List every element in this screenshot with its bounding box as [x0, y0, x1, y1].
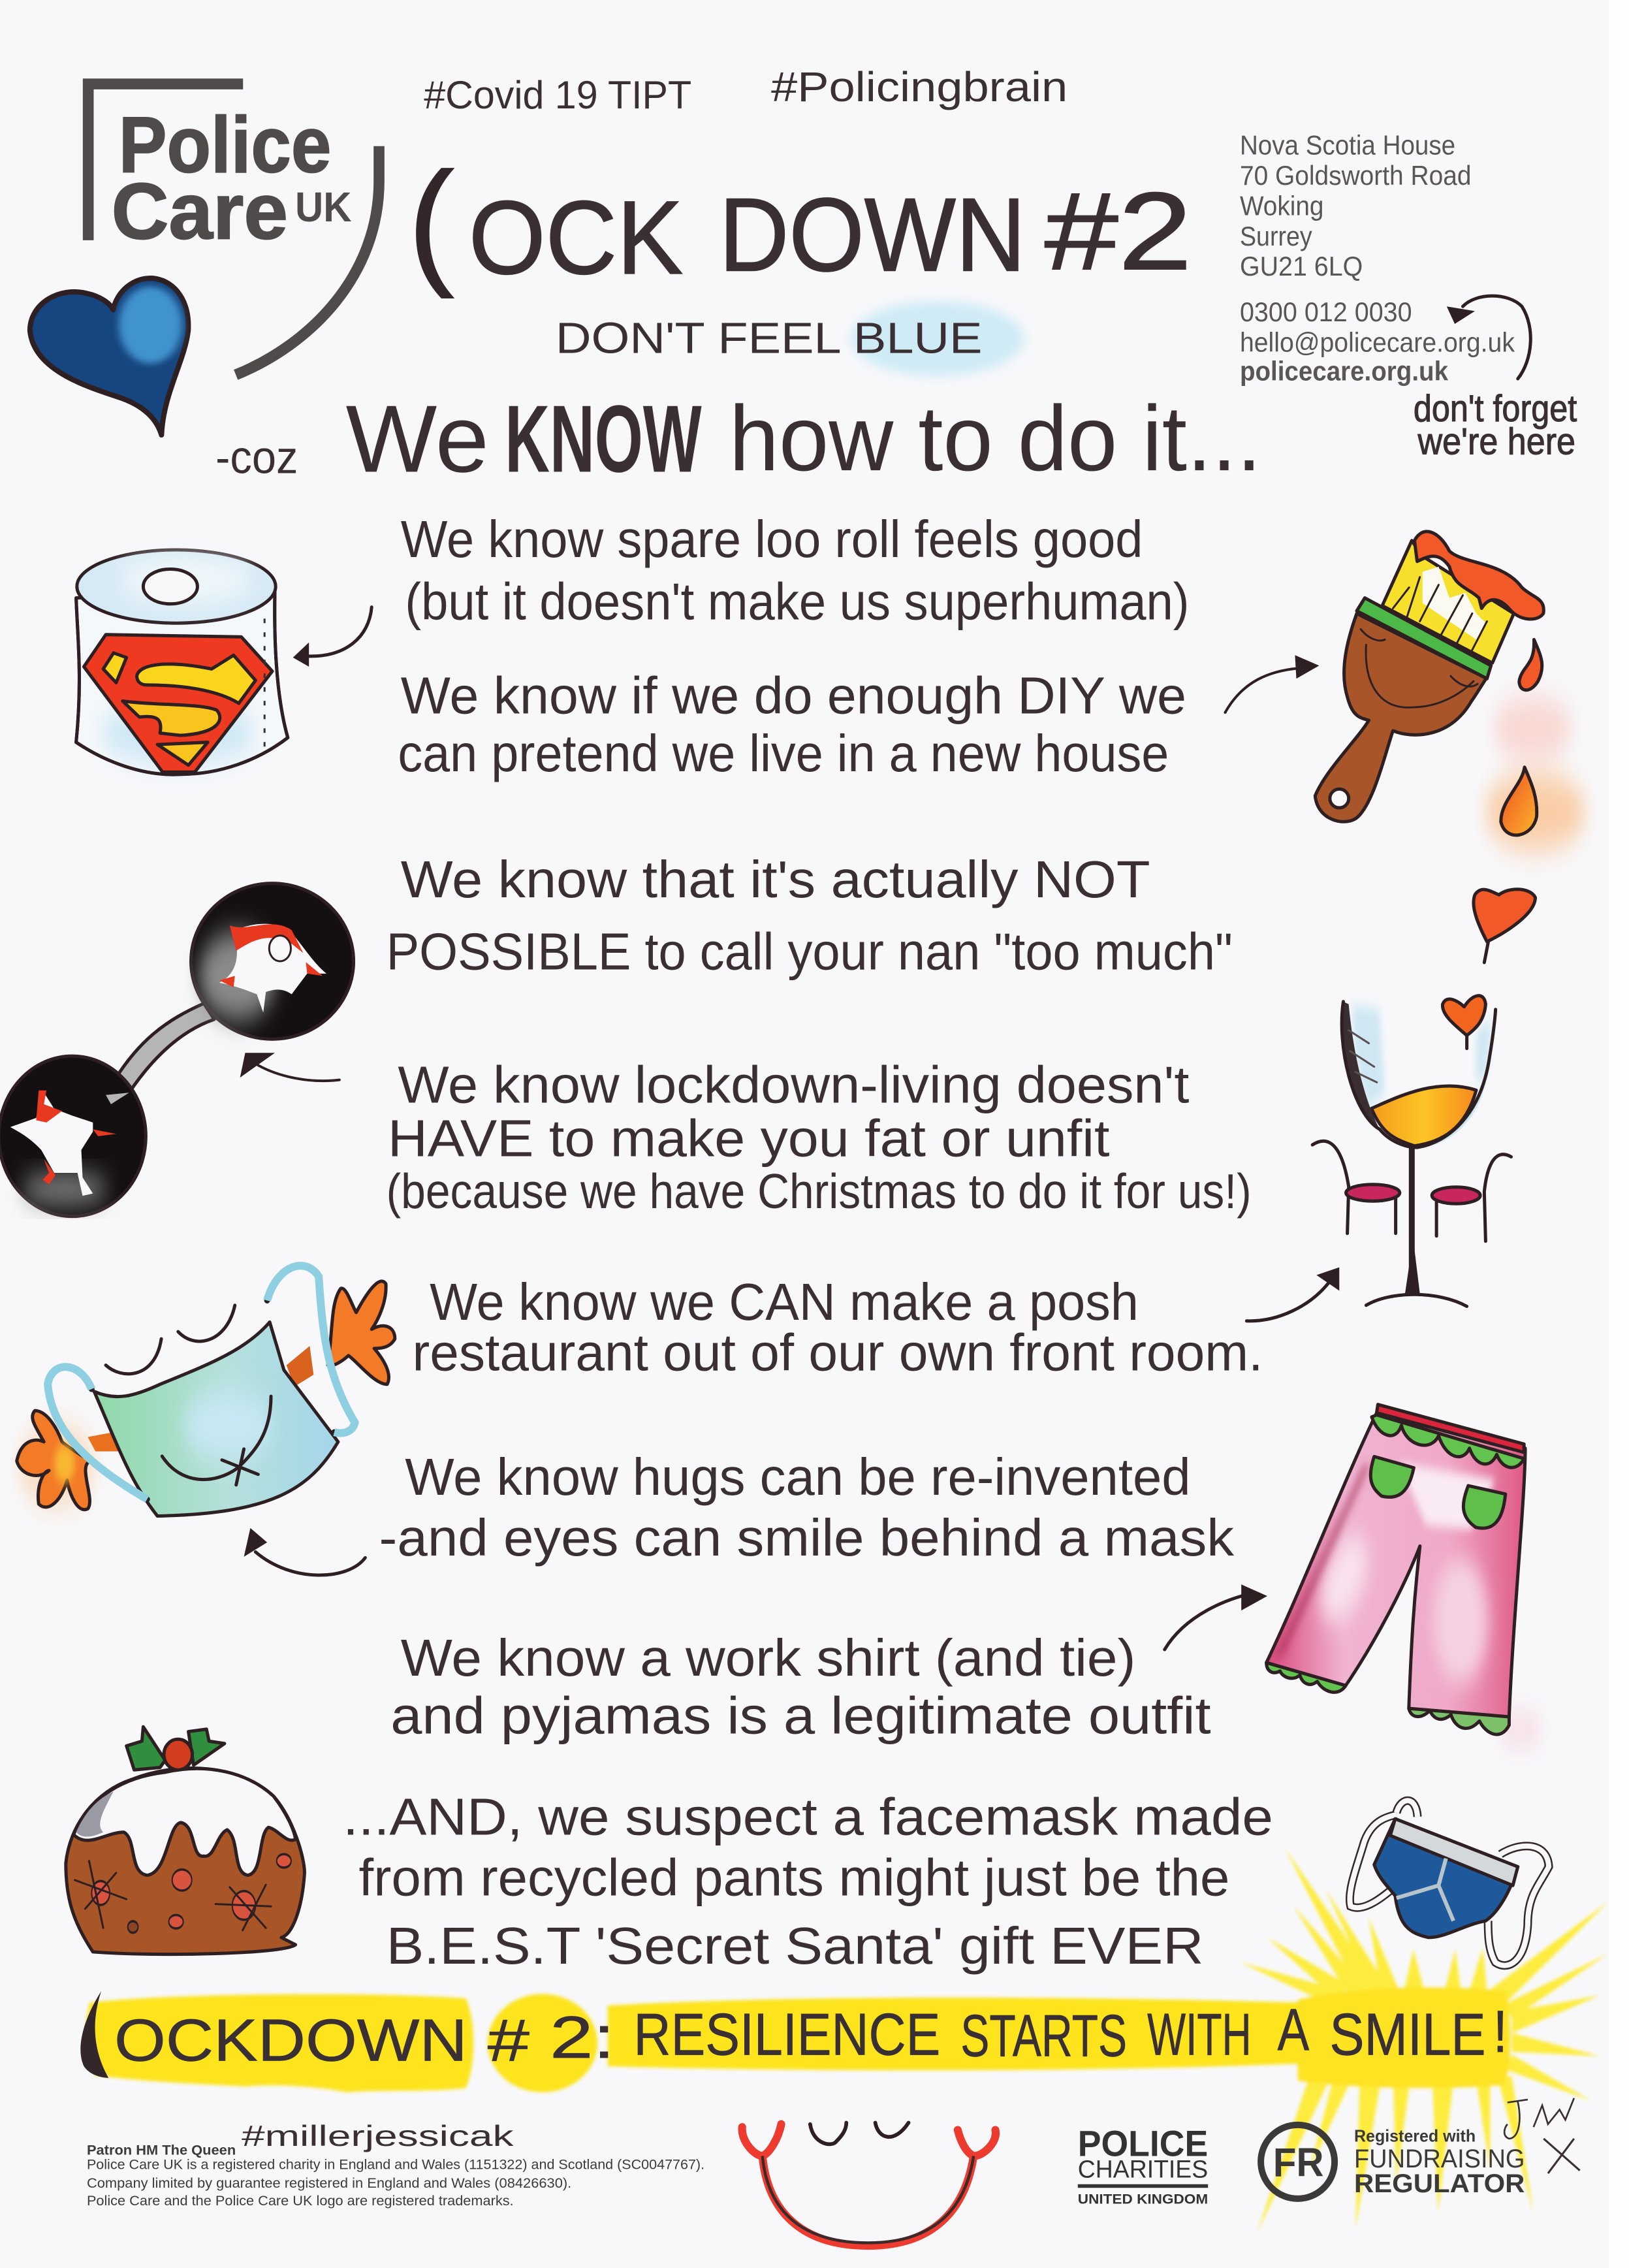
address block: 70 Goldsworth Road	[1240, 160, 1471, 191]
icon: floating heart small	[1442, 996, 1485, 1049]
Police Charities logo: CHARITIES	[1078, 2156, 1208, 2183]
banner: resilience starts with a smile: WITH	[1147, 2002, 1252, 2068]
body text: fat or unfit: HAVE to make you fat or unfit	[388, 1109, 1110, 1167]
footer legal text: Police Care and the Police Care UK logo are registered trademarks.	[87, 2194, 514, 2209]
arrow to toilet roll	[293, 607, 372, 667]
body text: hugs: -and eyes can smile behind a mask	[379, 1509, 1234, 1567]
Fundraising Regulator logo: FUNDRAISING	[1354, 2145, 1525, 2173]
subtitle: don't feel blue	[556, 301, 1024, 376]
body text: call your nan	[387, 850, 1233, 981]
body text: call your nan: POSSIBLE to call your nan "too much"	[387, 923, 1233, 981]
body text: fat or unfit: We know lockdown-living doesn't	[398, 1055, 1189, 1113]
Police Charities logo	[1078, 2123, 1208, 2207]
illustration: paint brush	[1315, 532, 1587, 850]
note: don't forget we're here: don't forget	[1414, 388, 1577, 430]
icon: floating heart large	[1474, 889, 1535, 963]
illustration: christmas pudding	[66, 1727, 304, 1955]
arrowhead	[1241, 1584, 1267, 1610]
body text: secret santa: from recycled pants might just be the	[359, 1849, 1229, 1907]
title: (	[408, 144, 454, 299]
banner: resilience starts with a smile: OCKDOWN	[114, 2007, 467, 2073]
body text: hugs	[379, 1448, 1234, 1567]
body text: work shirt: and pyjamas is a legitimate outfit	[390, 1686, 1211, 1744]
banner: resilience starts with a smile: SMILE	[1329, 2002, 1486, 2068]
note: don't forget we're here: we're here	[1417, 421, 1575, 463]
body text: hugs: We know hugs can be re-invented	[405, 1448, 1191, 1506]
illustration: superman toilet roll	[76, 550, 288, 775]
heading: we know how to do it: -coz	[215, 432, 298, 484]
heading: we know how to do it: KNOW	[505, 385, 702, 492]
address block: Surrey	[1240, 221, 1312, 251]
banner: resilience starts with a smile: 2:	[550, 2005, 615, 2071]
illustration: wine glass and chairs	[1312, 889, 1535, 1306]
body text: loo roll: We know spare loo roll feels good	[401, 510, 1143, 568]
Police Care UK logo: UK	[295, 184, 351, 231]
body text: loo roll: (but it doesn't make us superhuman)	[405, 572, 1189, 630]
title: DOWN	[719, 176, 1026, 293]
heading: we know how to do it: We	[346, 385, 489, 492]
Fundraising Regulator logo: Registered with	[1354, 2127, 1476, 2145]
heading: we know how to do it: how to do it...	[729, 387, 1261, 490]
body text: DIY	[398, 666, 1186, 782]
body text: call your nan: We know that it's actually NOT	[401, 850, 1150, 908]
banner: resilience starts with a smile: RESILIENCE	[634, 2002, 940, 2068]
address block: Nova Scotia House	[1240, 130, 1455, 161]
body text: posh restaurant: restaurant out of our own front room.	[413, 1323, 1263, 1381]
illustration: face mask with flowers	[17, 1266, 395, 1516]
body text: work shirt: We know a work shirt (and tie)	[401, 1629, 1135, 1687]
heading: we know how to do it	[215, 385, 1261, 492]
title: OCK	[469, 180, 683, 296]
Police Charities logo: UNITED KINGDOM	[1078, 2192, 1208, 2207]
banner: resilience starts with a smile	[80, 1991, 1508, 2092]
Police Care UK logo: Care	[112, 167, 288, 256]
Fundraising Regulator logo: REGULATOR	[1354, 2169, 1525, 2198]
body text: posh restaurant	[413, 1273, 1263, 1381]
footer legal text: Police Care UK is a registered charity in England and Wales (1151322) and Scotland (SC0047767).	[87, 2157, 704, 2172]
address block: hello@policecare.org.uk	[1240, 327, 1515, 357]
body text: secret santa	[343, 1788, 1273, 1975]
banner: resilience starts with a smile: !	[1493, 1999, 1508, 2065]
body text: fat or unfit: (because we have Christmas to do it for us!)	[387, 1164, 1252, 1219]
address block: Woking	[1240, 191, 1323, 221]
Fundraising Regulator logo: FR	[1273, 2141, 1323, 2186]
Police Care UK logo	[88, 84, 379, 375]
banner: resilience starts with a smile: STARTS	[960, 2004, 1127, 2069]
body text: secret santa: ...AND, we suspect a facemask made	[343, 1788, 1273, 1846]
address block: 0300 012 0030	[1240, 296, 1412, 327]
body text: loo roll	[401, 510, 1189, 630]
title: #2	[1045, 170, 1192, 293]
note: don't forget we're here	[1414, 388, 1577, 463]
signature	[1504, 2098, 1580, 2173]
illustration: dumbbell	[0, 884, 354, 1217]
smiley face	[742, 2123, 996, 2246]
Fundraising Regulator logo	[1261, 2125, 1525, 2199]
body text: secret santa: B.E.S.T 'Secret Santa' gift EVER	[387, 1917, 1204, 1975]
subtitle: don't feel blue: DON'T FEEL BLUE	[556, 315, 983, 363]
icon: blue heart	[30, 278, 188, 435]
Police Charities logo: POLICE	[1078, 2123, 1208, 2164]
footer legal text: Company limited by guarantee registered in England and Wales (08426630).	[87, 2176, 571, 2191]
illustration: pants face mask	[1350, 1800, 1549, 1966]
body text: posh restaurant: We know we CAN make a posh	[430, 1273, 1139, 1331]
arrow to dumbbell	[240, 1053, 340, 1081]
arrow to contact details	[1447, 296, 1530, 379]
footer legal text: Patron HM The Queen	[87, 2143, 236, 2158]
body text: DIY: We know if we do enough DIY we	[401, 666, 1186, 724]
banner: resilience starts with a smile: A	[1278, 1998, 1310, 2064]
arrow to paint brush	[1225, 655, 1319, 712]
body text: work shirt	[390, 1629, 1211, 1744]
address block: policecare.org.uk	[1240, 356, 1449, 387]
arrow to trousers	[1165, 1595, 1247, 1650]
footer legal text	[87, 2143, 704, 2209]
hashtag: Policingbrain: #Policingbrain	[771, 63, 1068, 110]
banner: resilience starts with a smile: #	[488, 2007, 530, 2073]
illustration: pink pyjama trousers	[1267, 1405, 1543, 1750]
address block: GU21 6LQ	[1240, 251, 1363, 281]
body text: fat or unfit	[387, 1055, 1252, 1219]
arrow to mask	[244, 1528, 365, 1575]
hashtag: millerjessicak: #millerjessicak	[242, 2120, 514, 2152]
body text: DIY: can pretend we live in a new house	[398, 724, 1169, 782]
hashtag: Covid 19 tipt: #Covid 19 TIPT	[424, 73, 691, 117]
address block	[1240, 130, 1515, 387]
arrow to wine glass	[1246, 1268, 1339, 1321]
title	[408, 144, 1192, 299]
Police Care UK logo: Police	[119, 101, 331, 189]
yellow sun burst	[1240, 1848, 1609, 2233]
